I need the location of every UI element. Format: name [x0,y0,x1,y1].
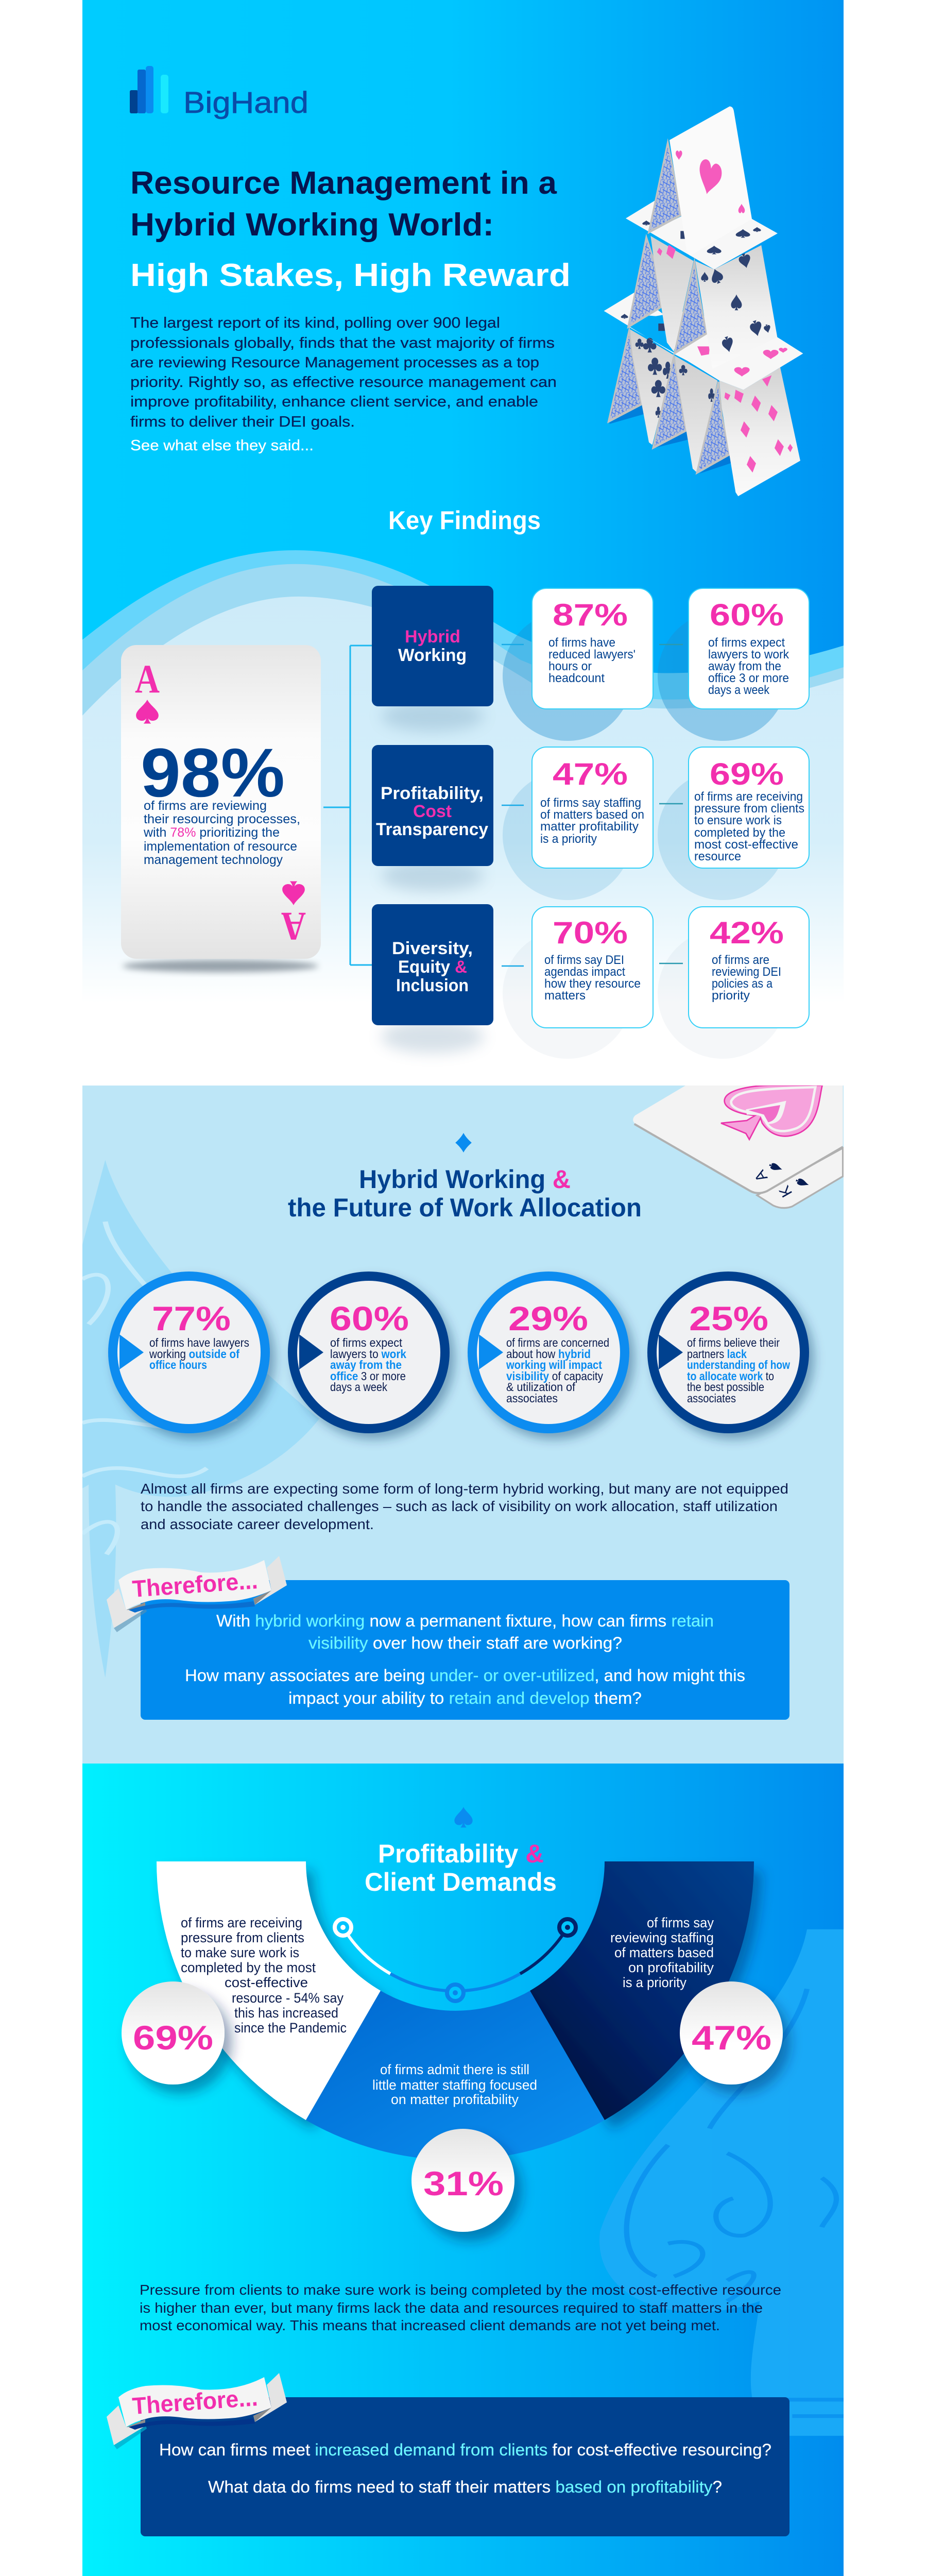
stat circle: 29 percent: & utilization of [506,1380,576,1394]
illustration: house of cards [604,107,803,496]
card: ace 98 percent: of firms are reviewing [144,799,267,813]
stat circle: 25 percent [647,1272,809,1433]
text: 47 percent description: is a priority [623,1975,686,1990]
callout panel: profitability questions: What data do firms need to staff their matters based on profitability ? [208,2478,722,2496]
intro text [130,315,557,430]
intro text: priority. Rightly so, as effective resource management can [130,374,557,391]
stat: 42 percent: reviewing DEI [712,965,781,979]
text: 69 percent description: of firms are receiving [181,1915,302,1930]
stat circle: 77 percent: 77% [152,1299,231,1337]
ribbon: therefore [107,1556,287,1632]
stat: 47 percent: of matters based on [540,808,644,822]
stat circle: 60 percent: days a week [330,1380,387,1394]
badge: 69 percent: 69% [133,2019,213,2057]
stat: 87 percent [532,588,653,709]
text: 69 percent description: resource - 54% say [232,1990,344,2006]
card: ace 98 percent: A [281,904,306,949]
stat circle: 29 percent: of firms are concerned [506,1336,609,1349]
stat: 87 percent: reduced lawyers' [548,648,636,662]
stat: 87 percent: hours or [548,659,592,673]
stat: 60 percent [689,588,809,709]
callout panel: profitability questions: How can firms meet increased demand from clients for cost-effective resourcing? [159,2441,771,2459]
card: ace 98 percent [121,645,321,972]
box: hybrid working: Hybrid [405,627,460,647]
badge: 31 percent: 31% [423,2164,504,2202]
text: 69 percent description: cost-effective [225,1975,308,1990]
stat: 69 percent: to ensure work is [694,814,782,827]
stat: 70 percent: 70% [553,916,628,950]
stat circle: 60 percent [288,1272,450,1433]
stat: 70 percent [532,907,653,1028]
text: 47 percent description [610,1915,714,1990]
badge: 69 percent [122,1981,225,2084]
paragraph: profitability: most economical way. This means that increased client demands are not yet being met. [140,2317,720,2333]
box: profitability, cost transparency: Cost [413,802,452,821]
connector lines [323,646,372,965]
arc: three progress nodes [335,1919,576,2001]
paragraph: hybrid working: and associate career development. [141,1516,374,1532]
stat circle: 25 percent: associates [687,1392,736,1405]
heading: hybrid working and the future of work allocation: the Future of Work Allocation [288,1193,642,1222]
heading: key findings: Key Findings [388,506,541,535]
stat: 70 percent: how they resource [544,977,641,991]
heading: profitability and client demands: Client Demands [365,1868,557,1896]
stat circle: 60 percent: of firms expect [330,1336,403,1349]
box: profitability, cost transparency: Profitability, [381,784,484,803]
stat circle: 25 percent: to allocate work to [687,1369,774,1383]
logo: BigHand [130,66,308,120]
callout panel: hybrid working questions [141,1580,789,1720]
logo: BigHand: BigHand [183,86,308,120]
text: 31 percent description: little matter staffing focused [372,2077,537,2093]
background circles behind stat cards [503,611,787,1059]
stat: 69 percent: of firms are receiving [694,790,803,804]
text: 47 percent description: reviewing staffing [610,1930,714,1945]
stat circle: 25 percent: partners lack [687,1347,747,1361]
stat circle: 29 percent: visibility of capacity [506,1369,603,1383]
callout panel: hybrid working questions: With hybrid working now a permanent fixture, how can firms retain [216,1612,714,1630]
intro text: The largest report of its kind, polling over 900 legal [130,315,500,331]
stat: 47 percent: 47% [553,757,628,791]
connector dashes [502,645,683,966]
chart: half donut [157,1861,754,2160]
title: Resource Management in a [130,165,557,201]
illustration: corner playing cards [633,1086,843,1208]
heading: hybrid working and the future of work allocation: Hybrid Working & [359,1165,571,1194]
stat circle: 29 percent: 29% [508,1299,588,1337]
stat: 69 percent: resource [694,850,741,863]
stat: 69 percent: completed by the [694,826,785,840]
text: 69 percent description [181,1915,347,2036]
card letters: A [751,1167,771,1184]
text: 47 percent description: on profitability [628,1960,714,1975]
see what else text: See what else they said... [130,437,314,454]
title [130,165,571,293]
callout panel: profitability questions [141,2397,789,2536]
stat: 42 percent [689,907,809,1028]
box: diversity, equity and inclusion [372,904,493,1025]
stat: 47 percent [532,747,653,868]
text: 69 percent description: pressure from clients [181,1930,304,1945]
stat circle: 29 percent: associates [506,1392,558,1405]
paragraph: profitability [140,2282,781,2333]
stat: 60 percent: 60% [710,598,784,632]
box: diversity, equity and inclusion: Equity & [398,957,467,977]
text: 31 percent description: on matter profitability [391,2092,519,2107]
text: 69 percent description: since the Pandemic [234,2020,347,2036]
card letters: K [776,1183,796,1200]
stat: 87 percent: headcount [548,671,605,685]
stat: 70 percent: agendas impact [544,965,625,979]
stat: 47 percent: is a priority [540,832,597,846]
callout panel: hybrid working questions: visibility over how their staff are working? [308,1634,622,1652]
stat circle: 25 percent: understanding of how [687,1358,790,1371]
stat: 69 percent: 69% [710,757,784,791]
stat circle: 25 percent: the best possible [687,1380,764,1394]
stat: 42 percent: priority [712,989,750,1003]
card: ace 98 percent: implementation of resource [144,839,297,854]
section: profitability background [82,1764,846,2576]
stat: 87 percent: 87% [553,598,628,632]
text: 31 percent description [372,2062,537,2107]
title: High Stakes, High Reward [130,258,571,293]
stat: 70 percent: of firms say DEI [544,953,624,967]
stat circle: 60 percent: away from the [330,1358,402,1371]
badge: 31 percent [411,2129,514,2232]
stat: 42 percent: 42% [710,916,784,950]
card: ace 98 percent: with 78% prioritizing the [143,825,280,840]
heading: hybrid working and the future of work allocation [288,1165,642,1222]
intro text: firms to deliver their DEI goals. [130,414,355,430]
box: profitability, cost transparency: Transparency [376,820,488,839]
text: 69 percent description: this has increased [234,2005,338,2021]
shadows under category boxes [381,701,484,1053]
text: 47 percent description: of firms say [647,1915,714,1930]
paragraph: profitability: is higher than ever, but many firms lack the data and resources required to staff matters in the [140,2300,763,2316]
callout panel: hybrid working questions: impact your ability to retain and develop them? [288,1689,642,1707]
card: ace 98 percent: A [135,656,160,701]
stat circle: 29 percent: working will impact [506,1358,602,1371]
stat circle: 29 percent [468,1272,629,1433]
stat circle: 60 percent: lawyers to work [330,1347,406,1361]
text: 69 percent description: completed by the most [181,1960,316,1975]
title: Hybrid Working World: [130,207,494,243]
box: hybrid working [372,586,493,706]
stat: 60 percent: away from the [708,659,781,673]
box: diversity, equity and inclusion: Inclusion [396,976,469,995]
icon: diamond [455,1133,472,1153]
paragraph: hybrid working [141,1481,788,1532]
intro text: professionals globally, finds that the vast majority of firms [130,335,555,351]
box: diversity, equity and inclusion: Diversity, [392,939,473,958]
intro text: improve profitability, enhance client service, and enable [130,394,538,410]
card: ace 98 percent: 98% [141,735,285,811]
badge: 47 percent [680,1981,783,2084]
badge: 47 percent: 47% [692,2019,771,2057]
paragraph: hybrid working: to handle the associated challenges – such as lack of visibility on work allocation, staff utilization [141,1498,778,1514]
ribbon: therefore: Therefore... [131,2384,259,2419]
stat circle: 77 percent: office hours [149,1358,207,1371]
stat: 69 percent [689,747,809,868]
stat: 42 percent: of firms are [712,953,769,967]
segment: navy [530,1861,754,2120]
box: profitability, cost transparency [372,745,493,866]
stat: 60 percent: office 3 or more [708,671,789,685]
stat circle: 77 percent [108,1272,270,1433]
segment: blue [306,1991,605,2160]
stat: 60 percent: of firms expect [708,636,785,650]
stat circle: 77 percent: of firms have lawyers [149,1336,249,1349]
stat: 60 percent: lawyers to work [708,648,789,662]
text: 47 percent description: of matters based [614,1945,714,1960]
card: ace 98 percent: their resourcing processes, [144,812,300,826]
callout panel: hybrid working questions: How many associates are being under- or over-utilized , and how might this [185,1666,745,1685]
stat: 60 percent: days a week [708,683,770,697]
ribbon: therefore: Therefore... [131,1567,259,1602]
stat: 42 percent: policies as a [712,977,773,991]
section: hero and key findings background [82,0,844,971]
stat: 69 percent: most cost-effective [694,838,798,852]
ribbon: therefore [107,2373,287,2449]
stat circle: 77 percent: working outside of [149,1347,239,1361]
section: hybrid working background [36,1086,844,1764]
paragraph: profitability: Pressure from clients to make sure work is being completed by the most cost-effective resource [140,2282,781,2298]
heading: profitability and client demands: Profitability & [378,1839,544,1868]
stat circle: 25 percent: 25% [689,1299,768,1337]
heading: profitability and client demands [365,1839,557,1896]
paragraph: hybrid working: Almost all firms are expecting some form of long-term hybrid working, but many are not equipped [141,1481,788,1497]
segment: white [157,1861,381,2120]
stat: 47 percent: matter profitability [540,820,639,834]
stat circle: 25 percent: of firms believe their [687,1336,780,1349]
intro text: are reviewing Resource Management processes as a top [130,354,539,371]
stat: 87 percent: of firms have [548,636,615,650]
section: DEI background [32,2538,844,2576]
text: 69 percent description: to make sure work is [181,1945,299,1960]
stat circle: 60 percent: 60% [330,1299,409,1337]
card: ace 98 percent: management technology [144,853,283,867]
stat: 47 percent: of firms say staffing [540,796,641,810]
stat: 69 percent: pressure from clients [694,802,804,816]
stat circle: 60 percent: office 3 or more [330,1369,406,1383]
stat: 70 percent: matters [544,989,586,1003]
stat circle: 29 percent: about how hybrid [506,1347,591,1361]
box: hybrid working: Working [398,646,467,665]
text: 31 percent description: of firms admit there is still [380,2062,529,2077]
card letters [751,1167,796,1200]
icon: spade [454,1807,473,1827]
